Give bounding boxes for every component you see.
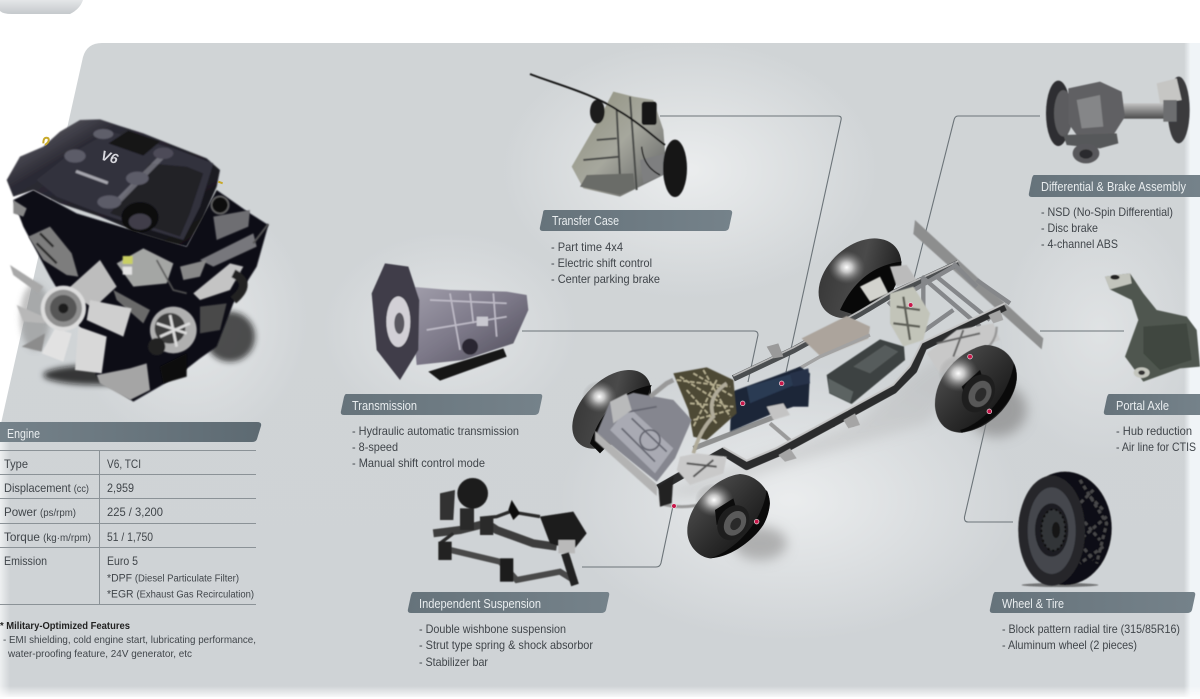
rear near tyre [935, 345, 1017, 433]
engine spec table: Torque (kg·m/rpm) [4, 530, 91, 544]
marker dots [672, 303, 992, 524]
engine heading: Engine [7, 427, 40, 441]
wheel and tire label [990, 592, 1195, 652]
transmission photo [372, 263, 528, 381]
front near tyre [687, 474, 770, 558]
transfer case photo [530, 74, 687, 197]
engine spec table: 225 / 3,200 [107, 505, 163, 519]
wheel and tire photo [1018, 472, 1112, 587]
differential and brake label [1029, 175, 1200, 251]
engine spec table: Type [4, 457, 28, 471]
leader lines [522, 116, 1124, 567]
lower frame rail [658, 307, 1005, 488]
differential and brake label: - Disc brake [1041, 221, 1098, 235]
military features note: - EMI shielding, cold engine start, lubricating performance, [3, 634, 256, 646]
engine ground shadow [20, 283, 255, 385]
independent suspension label: - Stabilizer bar [419, 655, 488, 669]
transmission label [341, 394, 542, 470]
military features note: water-proofing feature, 24V generator, etc [7, 648, 192, 660]
transmission label: - 8-speed [352, 440, 398, 454]
far rail highlight [733, 261, 958, 376]
engine spec table [0, 450, 256, 604]
bracket far rail [767, 343, 783, 358]
engine spec table: Displacement (cc) [4, 481, 89, 495]
rear suspension in chassis [927, 323, 1000, 373]
far frame rail [733, 263, 958, 378]
engine lower body [13, 190, 268, 402]
engine spec table: Emission [4, 554, 47, 568]
fuel tank [827, 339, 905, 404]
engine photo [7, 119, 268, 402]
suspension photo [433, 478, 587, 585]
rear bumper bar [913, 220, 1043, 349]
portal axle label [1104, 394, 1200, 454]
engine cover [7, 119, 220, 247]
wheel and tire label: - Block pattern radial tire (315/85R16) [1002, 622, 1180, 636]
independent suspension label: - Strut type spring & shock absorbor [419, 638, 593, 652]
front suspension in chassis [658, 453, 727, 507]
chassis illustration [557, 220, 1043, 560]
transfer case label: - Part time 4x4 [551, 240, 623, 254]
transfer case label [540, 210, 732, 286]
engine spec table: *DPF (Diesel Particulate Filter) [107, 572, 239, 584]
differential and brake label: - NSD (No-Spin Differential) [1041, 205, 1173, 219]
differential and brake label: - 4-channel ABS [1041, 237, 1118, 251]
top-left tab [0, 0, 83, 14]
transfer case label: Transfer Case [552, 214, 619, 228]
front bumper [595, 431, 657, 496]
engine spec table: 2,959 [107, 481, 134, 495]
engine dipstick handles [43, 138, 223, 183]
inner chassis rail [693, 417, 773, 448]
transmission in chassis [730, 367, 810, 432]
military features note [0, 620, 256, 660]
engine spec table: V6, TCI [107, 457, 141, 471]
engine spec table: Power (ps/rpm) [4, 505, 76, 519]
chassis shadows [660, 343, 1027, 560]
engine spec table: Euro 5 [107, 554, 138, 568]
engine spec table: 51 / 1,750 [107, 530, 153, 544]
engine badge V6: V6 [99, 147, 120, 167]
engine fan [10, 260, 132, 373]
rear differential [860, 265, 930, 347]
differential and brake photo [1046, 77, 1190, 163]
independent suspension label [408, 592, 609, 669]
military features note: * Military-Optimized Features [0, 620, 130, 632]
engine side details [13, 196, 268, 400]
rear far tyre [803, 222, 917, 334]
engine block in chassis [597, 380, 692, 482]
exhaust heat shield [802, 316, 870, 357]
wheel and tire label: Wheel & Tire [1002, 597, 1064, 611]
portal axle label: - Hub reduction [1116, 424, 1192, 438]
independent suspension label: Independent Suspension [419, 597, 541, 611]
frame brackets [778, 310, 1003, 462]
engine spec table: *EGR (Exhaust Gas Recirculation) [107, 588, 254, 600]
engine heading bar [0, 422, 261, 442]
engine in chassis [673, 367, 737, 453]
independent suspension label: - Double wishbone suspension [419, 622, 566, 636]
lower rail highlight [723, 303, 1005, 461]
wheel and tire label: - Aluminum wheel (2 pieces) [1002, 638, 1137, 652]
portal axle photo [1105, 273, 1200, 382]
inner connector [770, 423, 793, 443]
front far tyre [557, 355, 666, 464]
transmission label: Transmission [352, 399, 417, 413]
transfer case label: - Electric shift control [551, 256, 652, 270]
transmission label: - Manual shift control mode [352, 456, 485, 470]
portal axle label: Portal Axle [1116, 399, 1169, 413]
engine section [0, 422, 261, 660]
exhaust pipe [797, 335, 870, 370]
transmission label: - Hydraulic automatic transmission [352, 424, 519, 438]
transfer case label: - Center parking brake [551, 272, 660, 286]
cross members [888, 263, 1010, 338]
